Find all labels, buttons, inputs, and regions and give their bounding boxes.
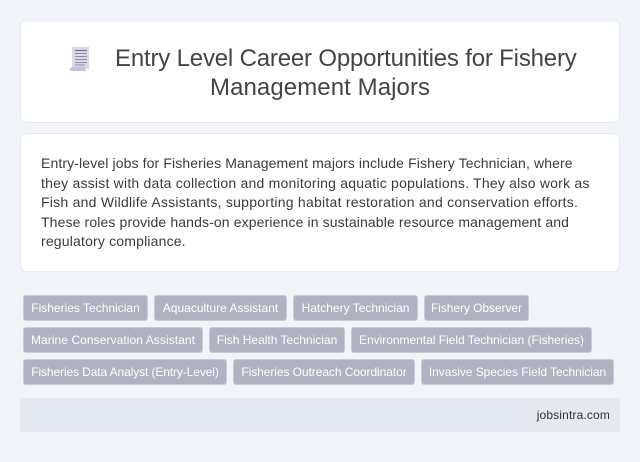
tag: Fish Health Technician	[217, 333, 337, 347]
heading: Entry Level Career Opportunities for Fishery	[115, 45, 577, 72]
panel: title card	[20, 20, 620, 123]
text block: description: regulatory compliance.	[41, 233, 186, 249]
footer source text: jobsintra.com	[537, 408, 610, 422]
tag: Fishery Observer	[431, 301, 522, 315]
footer bar	[20, 398, 620, 432]
icon: paper scroll	[70, 47, 89, 71]
tag	[351, 327, 592, 353]
text block: description: These roles provide hands-on experience in sustainable resource management and	[41, 214, 569, 230]
heading: Management Majors	[210, 74, 430, 101]
text block: description	[41, 155, 590, 249]
tag: Invasive Species Field Technician	[429, 365, 606, 379]
tag	[233, 359, 415, 385]
tag	[23, 327, 203, 353]
text block: description: Fish and Wildlife Assistants, supporting habitat restoration and conservation efforts.	[41, 194, 578, 210]
tag	[154, 295, 287, 321]
tag	[209, 327, 345, 353]
tag list	[23, 295, 614, 385]
tag: Environmental Field Technician (Fisheries)	[359, 333, 584, 347]
tag: Fisheries Outreach Coordinator	[241, 365, 407, 379]
text block: description: Entry-level jobs for Fisheries Management majors include Fishery Technician, where	[41, 155, 573, 171]
tag	[23, 295, 148, 321]
tag: Fisheries Technician	[31, 301, 140, 315]
heading	[115, 45, 577, 101]
tag: Fisheries Data Analyst (Entry-Level)	[31, 365, 219, 379]
tag: Aquaculture Assistant	[163, 301, 278, 315]
panel: description card	[20, 133, 620, 272]
tag	[293, 295, 418, 321]
text block: description: they assist with data collection and monitoring aquatic populations. They also work as	[41, 175, 590, 191]
tag: Hatchery Technician	[302, 301, 409, 315]
tag	[424, 295, 529, 321]
tag	[421, 359, 614, 385]
tag: Marine Conservation Assistant	[31, 333, 195, 347]
tag	[23, 359, 227, 385]
